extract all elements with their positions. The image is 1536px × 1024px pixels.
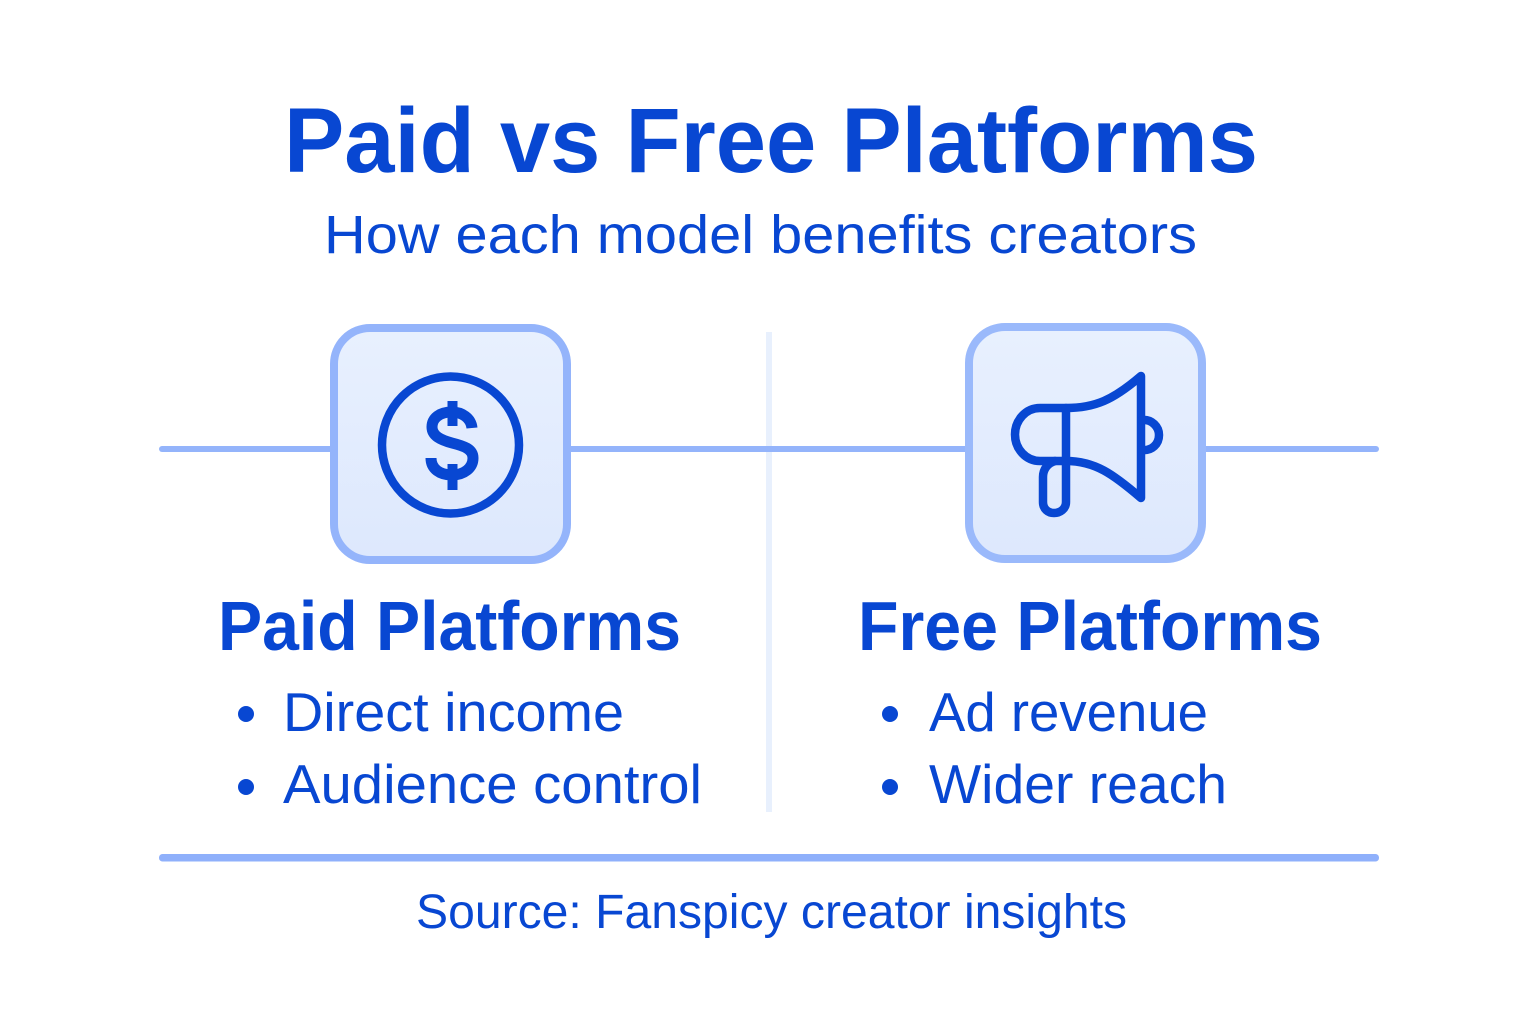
list: free platforms	[882, 681, 1227, 815]
icon: megaphone	[969, 327, 1202, 559]
list: paid platforms: Audience control	[283, 753, 702, 815]
icon: dollar coin	[334, 328, 567, 560]
vertical divider	[766, 332, 772, 812]
footer rule	[159, 854, 1379, 862]
list: paid platforms: Direct income	[283, 681, 624, 743]
horizontal connector line	[159, 446, 1379, 452]
list: free platforms: Ad revenue	[929, 681, 1208, 743]
list: paid platforms	[238, 681, 702, 815]
list: free platforms: Wider reach	[929, 753, 1227, 815]
title: Paid vs Free Platforms	[284, 90, 1258, 192]
heading: free platforms: Free Platforms	[858, 587, 1322, 665]
subtitle: How each model benefits creators	[324, 205, 1197, 265]
source note: Source: Fanspicy creator insights	[416, 886, 1127, 939]
heading: paid platforms: Paid Platforms	[218, 587, 681, 665]
